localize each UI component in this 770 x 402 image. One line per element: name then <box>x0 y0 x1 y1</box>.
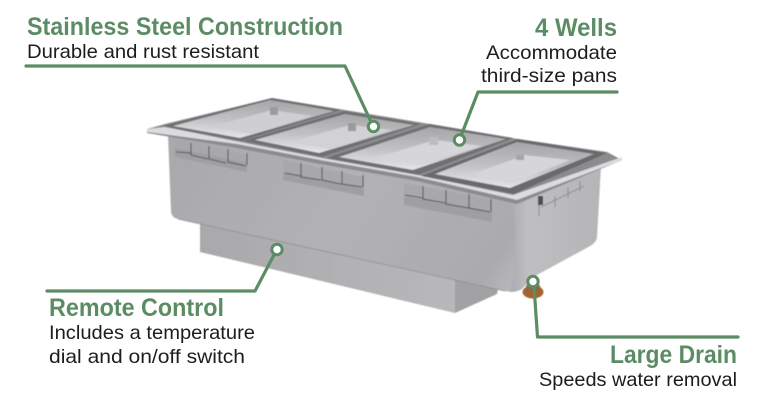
well body <box>168 134 601 292</box>
callout: 4 wells <box>454 14 617 145</box>
pan 3 <box>326 124 513 175</box>
description: Speeds water removal <box>539 369 737 391</box>
heading: Remote Control <box>49 294 224 322</box>
description: Durable and rust resistant <box>27 41 260 63</box>
leader line <box>26 66 372 124</box>
marker <box>272 244 282 255</box>
pan 4 <box>421 139 607 194</box>
leader line <box>47 253 275 291</box>
description line 2: third-size pans <box>481 65 617 87</box>
heading: Large Drain <box>610 341 737 369</box>
callout: stainless steel construction <box>26 13 379 132</box>
callout: remote control <box>47 244 282 368</box>
marker <box>368 121 379 132</box>
leader line <box>534 286 738 337</box>
description line 1: Includes a temperature <box>49 322 255 344</box>
callout: large drain <box>528 276 738 391</box>
heading: 4 Wells <box>535 14 617 42</box>
terminal strip middle <box>283 160 364 196</box>
marker <box>528 276 538 287</box>
leader line <box>461 92 617 136</box>
marker <box>454 135 465 145</box>
top rim <box>147 98 622 204</box>
terminal strip side <box>538 181 584 216</box>
food warmer product <box>147 98 622 313</box>
drain fitting <box>522 285 544 298</box>
terminal strip right <box>404 183 492 222</box>
heading: Stainless Steel Construction <box>27 13 343 41</box>
description line 1: Accommodate <box>486 42 617 64</box>
terminal strip left <box>175 139 247 172</box>
pan 1 <box>162 98 341 141</box>
pan 2 <box>243 111 421 157</box>
description line 2: dial and on/off switch <box>49 346 245 368</box>
base box <box>200 222 500 313</box>
